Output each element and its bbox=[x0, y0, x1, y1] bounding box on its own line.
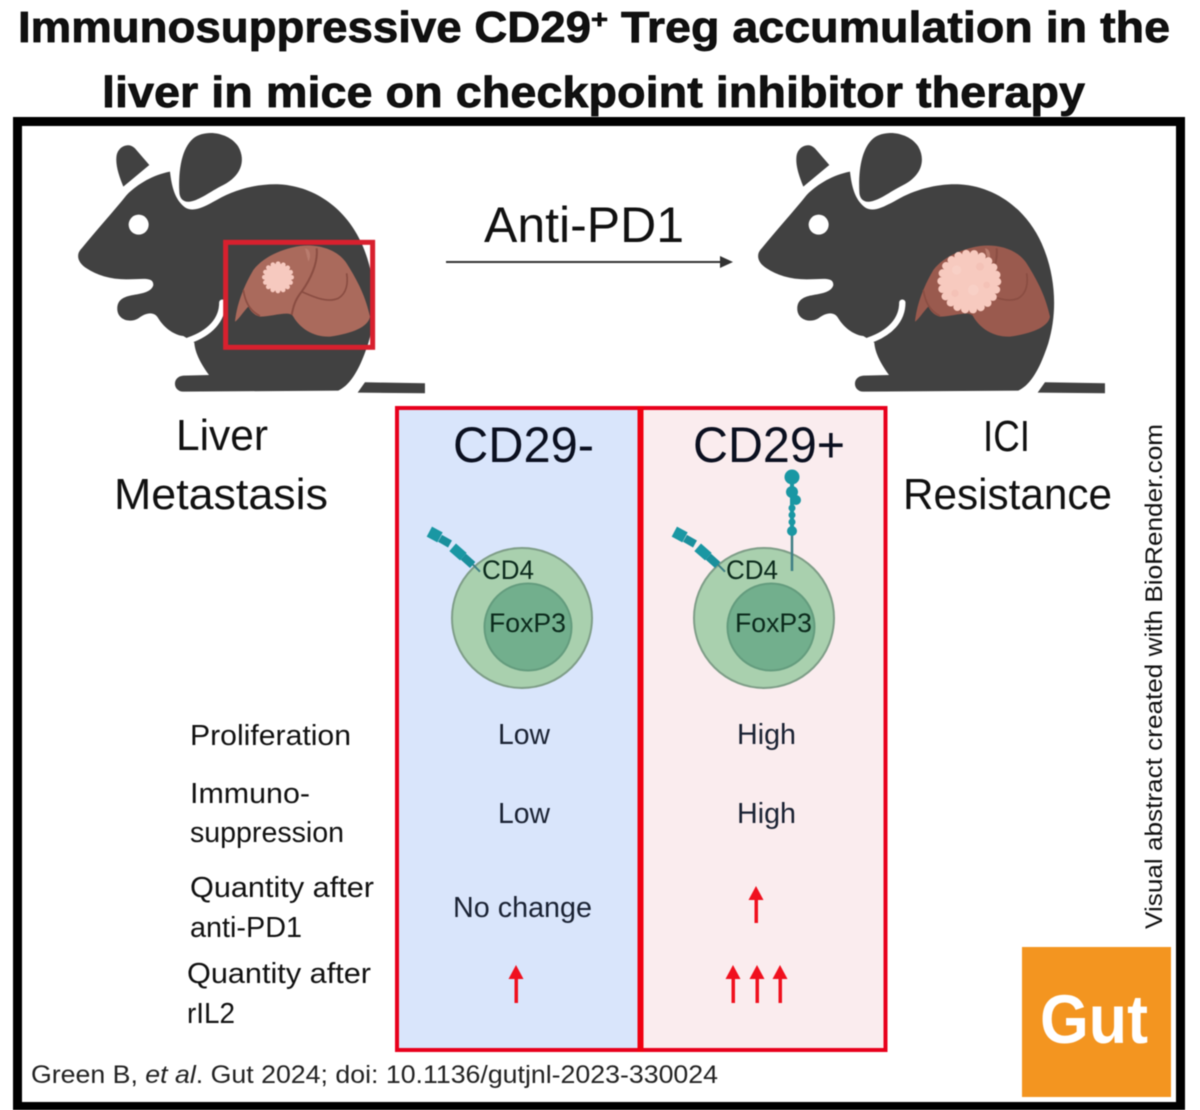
heading: CD29+: CD29+ bbox=[693, 417, 845, 473]
heading: CD29-: CD29- bbox=[453, 417, 594, 473]
icon: CD29 positive Treg cell: CD4 bbox=[726, 555, 778, 585]
arrows: three up, rIL2 CD29 positive bbox=[726, 965, 788, 1003]
CD29 negative values bbox=[453, 719, 592, 1003]
row labels: anti-PD1 bbox=[190, 912, 302, 944]
liver with small tumour bbox=[235, 246, 370, 337]
label: ICI Resistance: Resistance bbox=[903, 470, 1112, 519]
row labels: Immuno- bbox=[190, 778, 310, 810]
liver with large tumour bbox=[915, 246, 1050, 337]
arrow: up, anti-PD1 CD29 positive bbox=[748, 886, 764, 923]
row labels: Proliferation bbox=[190, 720, 351, 752]
row labels bbox=[187, 720, 374, 1030]
row labels: Quantity after bbox=[190, 872, 374, 904]
CD29 positive values: High bbox=[737, 798, 796, 830]
CD29 negative values: Low bbox=[498, 798, 551, 830]
icon: CD29 positive Treg cell: FoxP3 bbox=[735, 608, 812, 638]
icon: CD29 negative Treg cell: FoxP3 bbox=[489, 608, 566, 638]
credit: BioRender: Visual abstract created with BioRender.com bbox=[1141, 424, 1168, 929]
row labels: Quantity after bbox=[187, 958, 371, 990]
CD29 negative values: No change bbox=[453, 892, 592, 924]
title: liver in mice on checkpoint inhibitor therapy bbox=[102, 68, 1086, 117]
panel: CD29 positive bbox=[640, 408, 886, 1050]
title: Immunosuppressive CD29 bbox=[18, 3, 591, 52]
row labels: rIL2 bbox=[187, 998, 235, 1030]
arrow: treatment bbox=[446, 256, 733, 268]
row labels: suppression bbox=[190, 817, 344, 849]
label: Liver Metastasis: Liver bbox=[176, 411, 268, 460]
treatment label: Anti-PD1: Anti-PD1 bbox=[484, 197, 684, 253]
CD29 positive values bbox=[726, 719, 796, 1003]
icon: CD29 negative Treg cell: CD4 bbox=[482, 555, 534, 585]
logo: Gut bbox=[1022, 947, 1171, 1097]
label: Liver Metastasis bbox=[114, 411, 328, 519]
icon: CD29 receptor bbox=[784, 470, 801, 571]
label: ICI Resistance bbox=[903, 412, 1112, 519]
icon: mouse with liver metastasis bbox=[78, 133, 425, 393]
logo: Gut: Gut bbox=[1040, 981, 1148, 1058]
icon: CD29 positive Treg cell bbox=[674, 470, 834, 688]
CD29 negative values: Low bbox=[498, 719, 551, 751]
label: ICI Resistance: ICI bbox=[983, 412, 1030, 461]
icon: mouse with enlarged tumour bbox=[758, 133, 1105, 393]
arrow: up, rIL2 CD29 negative bbox=[508, 965, 524, 1003]
CD29 positive values: High bbox=[737, 719, 796, 751]
title bbox=[18, 3, 1170, 117]
label: Liver Metastasis: Metastasis bbox=[114, 470, 328, 519]
title: Treg accumulation in the bbox=[621, 3, 1170, 52]
icon: CD29 negative Treg cell bbox=[429, 532, 592, 688]
title: + bbox=[591, 4, 608, 34]
citation: Green B, et al. Gut 2024; doi: 10.1136/gutjnl-2023-330024 bbox=[31, 1061, 718, 1089]
panel: CD29 negative bbox=[397, 408, 640, 1050]
